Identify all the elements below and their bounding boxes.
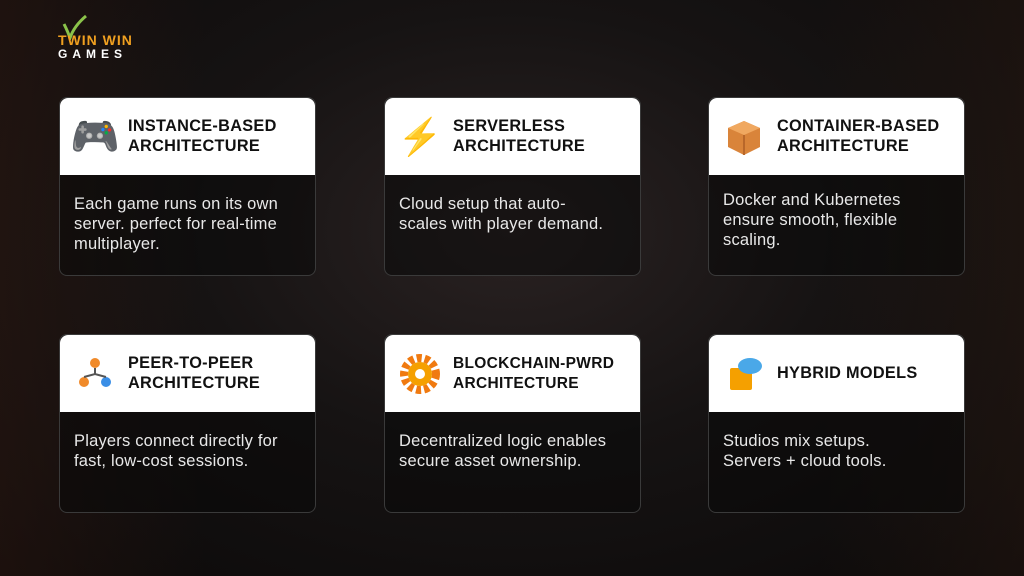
card: serverless <box>384 97 641 276</box>
card: p2p: PEER-TO-PEER <box>128 354 253 372</box>
card: instance-based: INSTANCE-BASED <box>128 117 277 135</box>
card: serverless: Cloud setup that auto- <box>399 195 566 213</box>
card: serverless: ⚡ <box>398 116 442 156</box>
card: serverless: scales with player demand. <box>399 215 603 233</box>
card: instance-based: Each game runs on its own server. perfect for real-time multiplayer. <box>74 195 278 253</box>
card: serverless: ARCHITECTURE <box>453 136 585 154</box>
card: hybrid <box>708 334 965 513</box>
logo <box>58 15 133 61</box>
card: serverless: SERVERLESS <box>453 117 565 135</box>
card: blockchain: Decentralized logic enables secure asset ownership. <box>399 432 606 470</box>
card: p2p: Players connect directly for fast, low-cost sessions. <box>74 432 278 470</box>
logo: TWIN WIN <box>58 32 133 48</box>
card: instance-based: ARCHITECTURE <box>128 136 260 154</box>
card: blockchain: ARCHITECTURE <box>453 374 579 392</box>
card: hybrid: HYBRID MODELS <box>777 364 918 382</box>
logo: GAMES <box>58 47 127 61</box>
card: p2p <box>59 334 316 513</box>
card: p2p: ARCHITECTURE <box>128 374 260 392</box>
card: container: CONTAINER-BASED <box>777 117 940 135</box>
card: container: Docker and Kubernetes ensure smooth, flexible scaling. <box>723 191 901 249</box>
card: blockchain: BLOCKCHAIN-PWRD <box>453 355 614 372</box>
card: blockchain <box>384 334 641 513</box>
card: hybrid: Studios mix setups. <box>723 432 870 450</box>
card: container <box>708 97 965 276</box>
card: container: ARCHITECTURE <box>777 136 909 154</box>
card: hybrid: Servers + cloud tools. <box>723 452 887 470</box>
card: instance-based: 🎮 <box>70 115 120 159</box>
card: instance-based <box>59 97 316 276</box>
